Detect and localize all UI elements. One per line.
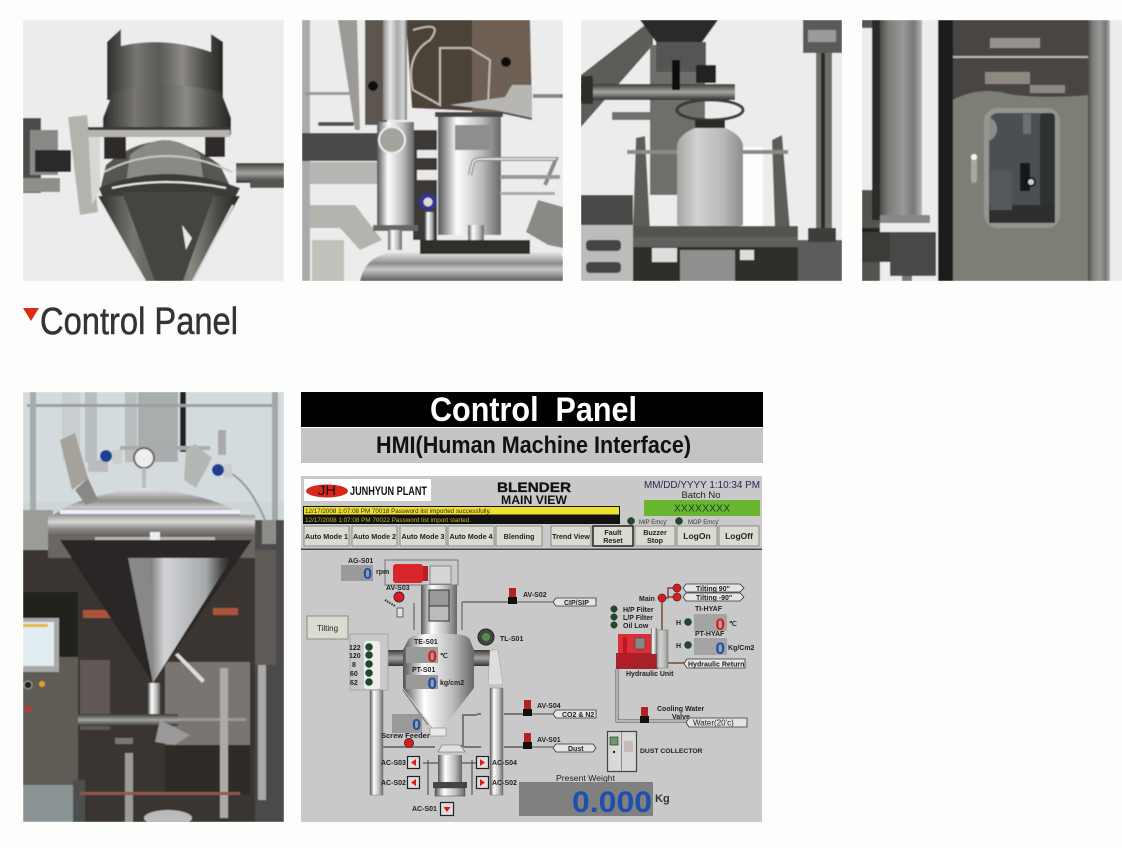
valve AV-S03 [385, 585, 410, 617]
tilting button [307, 616, 348, 639]
screen title: BLENDER [497, 479, 571, 495]
pressure readout PT-HYAF: PT-HYAF [695, 631, 725, 638]
button row: Reset [603, 536, 623, 545]
main valve and tilting tags [639, 584, 744, 603]
main valve and tilting tags: Tilting -90" [696, 595, 732, 602]
photo: stainless cabinet with sight window [862, 20, 1122, 281]
valve AV-S01 to dust: AV-S01 [537, 737, 561, 744]
button row: LogOn [683, 531, 711, 541]
actuator AC-S03: AC-S03 [381, 760, 406, 767]
limit switch panel: 62 [350, 680, 358, 687]
valve AV-S02 to CIP/SIP: AV-S02 [523, 592, 547, 599]
weight readout: Kg [655, 793, 670, 805]
button row: Stop [647, 536, 664, 545]
limit switch panel [349, 634, 388, 690]
main valve and tilting tags: Main [639, 596, 655, 603]
hydraulic unit [616, 588, 684, 678]
screw feeder readout: 0 [412, 717, 421, 734]
button row: Auto Mode 4 [449, 532, 493, 541]
load cell TL-S01: TL-S01 [500, 636, 523, 643]
dust collector: DUST COLLECTOR [640, 748, 703, 755]
photo: container under blender outlet [575, 20, 842, 281]
title bar: Control Panel: Control Panel [430, 391, 637, 429]
valve AV-S04 to CO2 and N2: CO2 & N2 [562, 712, 594, 719]
agitator motor [385, 560, 458, 585]
cooling water valve: Water(20'c) [693, 718, 734, 728]
screw feeder readout: Screw Feeder [381, 731, 430, 740]
filter status indicators: H/P Filter [623, 607, 654, 614]
filter status indicators [611, 606, 654, 630]
temperature readout TE-S01: 0 [428, 647, 437, 666]
valve AV-S02 to CIP/SIP: CIP/SIP [564, 600, 589, 607]
pressure readout PT-HYAF: Kg/Cm2 [728, 645, 755, 652]
cooling water valve: Valve [672, 714, 690, 721]
alarm message bar: 12/17/2008 1:07:08 PM 70022 Password list import started. [305, 518, 471, 524]
button row [304, 526, 759, 546]
limit switch panel: 8 [352, 662, 356, 669]
actuator AC-S04 [476, 756, 517, 768]
pressure readout PT-S01: 0 [428, 674, 437, 693]
pressure readout PT-S01: PT-S01 [412, 667, 435, 674]
actuator AC-S02 right: AC-S02 [492, 780, 517, 787]
icon: red section marker [23, 308, 39, 321]
pressure readout PT-HYAF [676, 631, 755, 658]
actuator AC-S02 right [476, 776, 517, 788]
dust collector [608, 732, 703, 772]
button row: Fault [604, 528, 622, 537]
screen title [497, 479, 571, 507]
temperature readout TI-HYAF: TI-HYAF [695, 606, 723, 613]
photo: blender installation with touch panel [23, 392, 284, 826]
pressure readout PT-S01: kg/cm2 [440, 680, 464, 687]
button row: Auto Mode 2 [353, 532, 396, 541]
agitator speed readout: rpm [376, 569, 389, 576]
emergency indicators: MOP Emcy' [688, 520, 719, 526]
cooling water valve [617, 669, 747, 728]
pressure readout PT-S01 [406, 667, 464, 693]
emergency indicators [628, 518, 719, 526]
limit switch panel: 60 [350, 671, 358, 678]
button row: Trend View [552, 532, 590, 541]
alarm message bar [303, 506, 620, 524]
temperature readout TE-S01 [406, 639, 448, 666]
hydraulic return tag: Hydraulic Return [688, 662, 744, 668]
screen title: MAIN VIEW [501, 495, 567, 507]
subtitle bar: HMI [301, 428, 763, 463]
button row: Buzzer [643, 528, 667, 537]
agitator speed readout: 0 [363, 566, 372, 583]
limit switch panel: 122 [349, 645, 361, 652]
temperature readout TE-S01: ℃ [440, 652, 448, 660]
temperature readout TI-HYAF: ℃ [729, 620, 737, 628]
temperature readout TI-HYAF: H [676, 620, 681, 627]
pressure readout PT-HYAF: 0 [716, 639, 725, 658]
filter status indicators: L/P Filter [623, 615, 653, 622]
button row: Blending [504, 532, 534, 541]
valve AV-S04 to CO2 and N2 [523, 700, 596, 719]
batch information: Batch No [681, 490, 721, 501]
hydraulic return tag [684, 659, 745, 668]
heading: Control Panel: Control Panel [40, 301, 238, 343]
temperature readout TI-HYAF: 0 [716, 615, 725, 634]
logo: Junhyun Plant: JUNHYUN PLANT [350, 484, 428, 498]
pressure readout PT-HYAF: H [676, 643, 681, 650]
tilting button: Tilting [317, 624, 338, 633]
weight readout: 0.000 [572, 786, 652, 819]
screw feeder readout [381, 714, 430, 748]
photo: blender cone with hopper [23, 20, 284, 281]
agitator speed readout [341, 558, 389, 583]
hydraulic unit: Hydraulic Unit [626, 671, 674, 678]
filter status indicators: Oil Low [623, 623, 649, 630]
batch information [644, 479, 760, 516]
load cell TL-S01 [478, 629, 523, 645]
button row: Auto Mode 1 [305, 532, 348, 541]
blender column and vessel [370, 585, 523, 796]
logo: Junhyun Plant: JH [318, 482, 336, 498]
temperature readout TE-S01: TE-S01 [414, 639, 438, 646]
valve AV-S04 to CO2 and N2: AV-S04 [537, 703, 561, 710]
valve AV-S01 to dust [523, 733, 596, 753]
temperature readout TI-HYAF [676, 606, 737, 634]
actuator AC-S01 [412, 802, 454, 816]
photo: filter housing and piping [302, 20, 563, 281]
batch information: MM/DD/YYYY 1:10:34 PM [644, 479, 760, 491]
valve AV-S02 to CIP/SIP [462, 588, 596, 607]
valve AV-S01 to dust: Dust [568, 746, 584, 753]
button row: LogOff [725, 531, 753, 541]
actuator AC-S02 left [381, 776, 420, 788]
actuator AC-S01: AC-S01 [412, 806, 437, 813]
panel: HMI screen [301, 476, 762, 822]
emergency indicators: MIP Emcy' [639, 520, 667, 526]
alarm message bar: 12/17/2008 1:07:08 PM 70018 Password list imported successfully. [305, 509, 491, 515]
subtitle bar: HMI: HMI(Human Machine Interface) [376, 432, 691, 459]
agitator speed readout: AG-S01 [348, 558, 373, 565]
valve AV-S03: AV-S03 [386, 585, 410, 592]
button row: Auto Mode 3 [401, 532, 445, 541]
batch information: XXXXXXXX [674, 504, 730, 514]
actuator AC-S02 left: AC-S02 [381, 780, 406, 787]
title bar: Control Panel [301, 391, 763, 429]
cooling water valve: Cooling Water [657, 706, 704, 713]
weight readout [519, 774, 670, 819]
main valve and tilting tags: Tilting 90" [696, 586, 730, 593]
logo: Junhyun Plant [304, 479, 431, 501]
actuator AC-S03 [381, 756, 420, 768]
actuator AC-S04: AC-S04 [492, 760, 517, 767]
blender process diagram [307, 558, 755, 819]
limit switch panel: 120 [349, 653, 361, 660]
weight readout: Present Weight [556, 774, 616, 783]
